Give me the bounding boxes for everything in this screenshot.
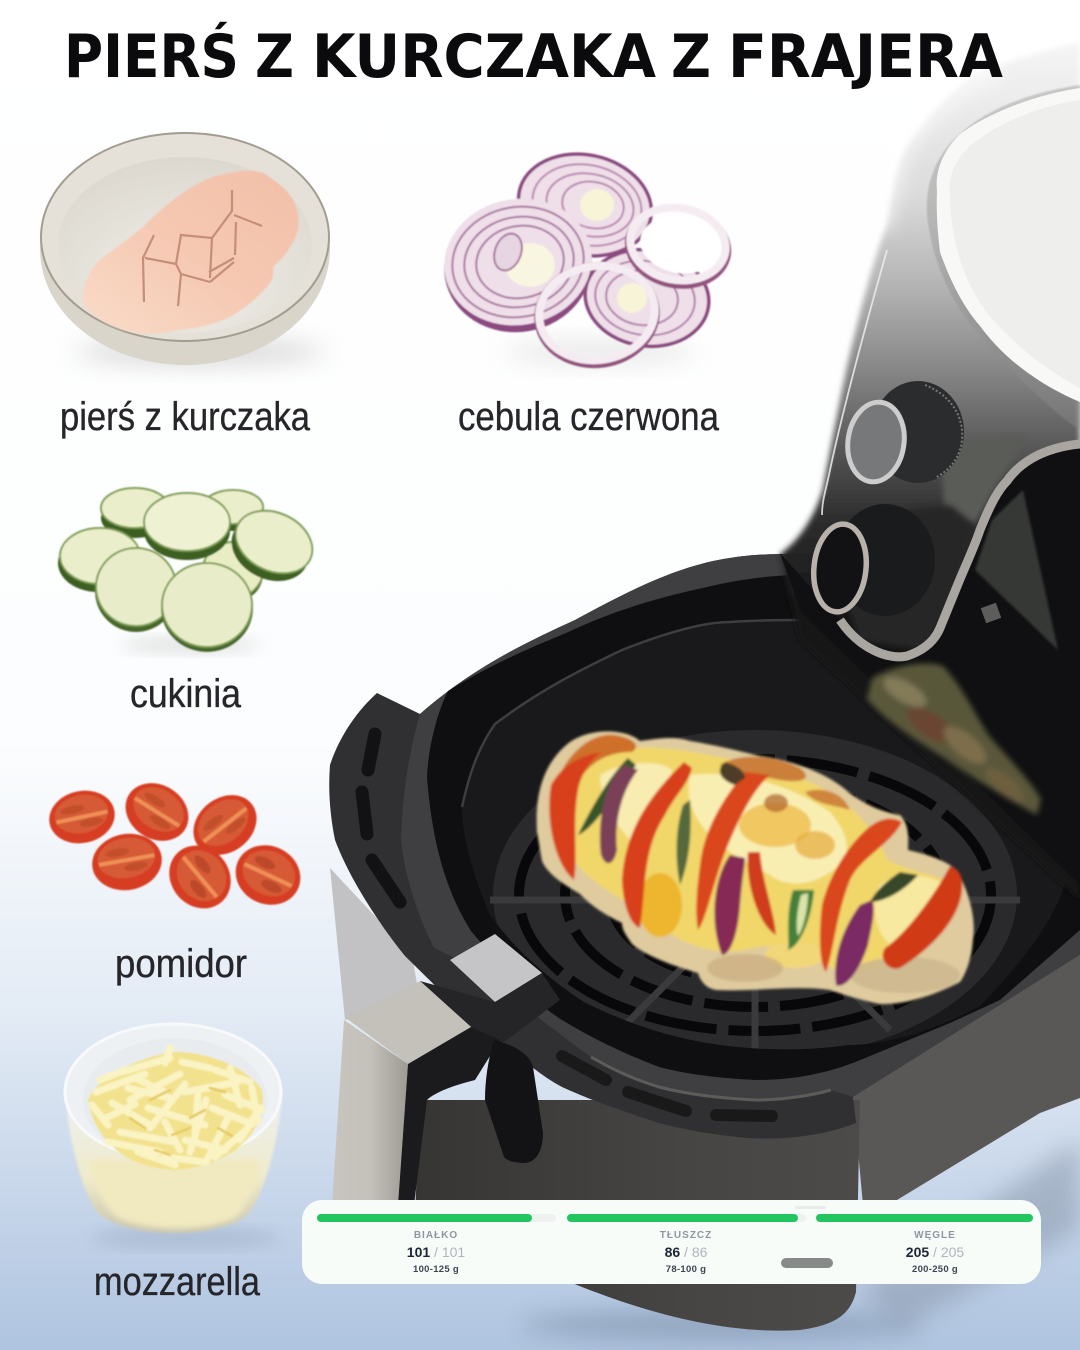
drawer black interior bbox=[427, 575, 1080, 1080]
panel glints bbox=[981, 603, 1001, 623]
red onion slices bbox=[600, 765, 638, 863]
macro: fat: 78-100 g bbox=[666, 1264, 706, 1275]
ingredient: chicken in bowl bbox=[40, 133, 330, 366]
cup shadow bbox=[90, 1228, 280, 1248]
fryer body centre bbox=[415, 1100, 860, 1331]
tomato 5 bbox=[157, 833, 243, 921]
upper dial bbox=[843, 381, 964, 486]
macro: protein: 100-125 g bbox=[413, 1264, 459, 1275]
ingredient: mozzarella in cup bbox=[65, 1024, 282, 1248]
onion ring bottom bbox=[529, 256, 665, 374]
rim slots bottom bbox=[562, 1056, 772, 1116]
floor shadow right bbox=[860, 1140, 1080, 1330]
label: tomato: pomidor bbox=[115, 942, 247, 986]
drag handle bbox=[781, 1258, 833, 1268]
title: Z bbox=[671, 22, 711, 92]
cup rim bbox=[65, 1024, 281, 1160]
air fryer with cooked chicken bbox=[329, 42, 1080, 1341]
onion ring right bbox=[621, 200, 735, 294]
control panel bbox=[780, 444, 1080, 885]
macro: carbs bbox=[816, 1214, 1033, 1275]
fryer white lid bbox=[937, 88, 1080, 402]
macro: protein bbox=[317, 1214, 556, 1275]
ingredient: zucchini slices bbox=[58, 488, 323, 653]
shredded cheese bbox=[88, 1048, 263, 1170]
chicken lower crust bbox=[850, 957, 960, 993]
fryer body right side bbox=[853, 955, 1080, 1205]
drawer outer rim bbox=[329, 554, 1080, 1139]
basil leaves bbox=[578, 758, 636, 835]
label: onion: cebula czerwona bbox=[458, 395, 720, 439]
chicken with toppings bbox=[537, 731, 974, 1004]
zucchini piece bbox=[788, 890, 814, 950]
dark face between dials bbox=[830, 505, 975, 650]
handle silver front bbox=[332, 1020, 408, 1205]
bowl bbox=[40, 133, 330, 365]
label: mozzarella: mozzarella bbox=[94, 1260, 261, 1304]
silver trim curve bbox=[840, 444, 1080, 657]
cheese seen through the cup bbox=[88, 1160, 260, 1228]
macro: carbs: 205 / 205 bbox=[906, 1244, 964, 1260]
tomato 4 bbox=[88, 828, 166, 896]
handle black grip bbox=[485, 1040, 543, 1163]
ingredient: cherry tomatoes bbox=[44, 772, 310, 921]
tomato 2 bbox=[115, 772, 199, 852]
floor shadow bbox=[520, 1309, 920, 1341]
fryer body left wedge bbox=[330, 868, 420, 1020]
zucchini left bbox=[58, 528, 140, 592]
reflection of chicken in panel bbox=[867, 663, 1041, 815]
basket grid bbox=[490, 730, 1020, 1060]
rim slots left bbox=[362, 734, 400, 902]
lid outer band bbox=[927, 85, 1080, 430]
silver handle cap bbox=[346, 981, 471, 1064]
grey face beside dials bbox=[940, 436, 1030, 525]
melted cheese bbox=[556, 748, 951, 971]
cup body bbox=[66, 1095, 282, 1233]
title: Z bbox=[255, 22, 294, 92]
title bbox=[64, 21, 1004, 92]
housing soft highlight edge bbox=[884, 68, 1000, 230]
title: FRAJERA bbox=[728, 22, 1004, 92]
onion large slice bbox=[434, 187, 602, 344]
chicken breast bbox=[537, 731, 974, 1004]
macro: carbs: WĘGLE bbox=[914, 1230, 956, 1241]
macro: protein: BIAŁKO bbox=[414, 1230, 458, 1241]
zucchini centre bbox=[144, 493, 230, 560]
ingredient: red onion bbox=[434, 142, 735, 374]
macro: fat bbox=[567, 1214, 806, 1275]
onion lower right slice bbox=[579, 242, 715, 354]
zucchini hidden bbox=[203, 542, 263, 602]
tomato 3 bbox=[182, 783, 268, 867]
basket liner bbox=[462, 620, 1068, 1049]
label: zucchini: cukinia bbox=[130, 672, 242, 716]
zucchini back left bbox=[101, 488, 169, 538]
drawer wall bbox=[401, 554, 1080, 1100]
zucchini back right bbox=[203, 490, 263, 531]
lower rim band bbox=[591, 1057, 831, 1100]
zucchini front right bbox=[161, 563, 253, 652]
panel reflection grey wedge bbox=[975, 490, 1058, 650]
label: chicken: pierś z kurczaka bbox=[60, 395, 311, 439]
title: PIERŚ bbox=[64, 21, 239, 92]
golden crust top bbox=[553, 735, 636, 790]
macro: fat: TŁUSZCZ bbox=[660, 1230, 712, 1241]
raw chicken bbox=[82, 171, 299, 334]
macro: protein: 101 / 101 bbox=[407, 1244, 465, 1260]
zucchini front left bbox=[95, 548, 177, 632]
onion back slice bbox=[509, 142, 661, 268]
lower dial bbox=[810, 504, 935, 616]
macro: fat: 86 / 86 bbox=[665, 1244, 708, 1260]
fryer upper housing bbox=[780, 42, 1080, 900]
title: KURCZAKA bbox=[312, 22, 657, 92]
macro card bbox=[302, 1200, 1041, 1284]
silver handle slider bbox=[450, 934, 542, 1002]
tomato 6 bbox=[226, 835, 310, 915]
tomato slices bbox=[549, 752, 603, 880]
chicken score marks bbox=[143, 190, 262, 306]
macro: carbs: 200-250 g bbox=[912, 1264, 958, 1275]
tomato 1 bbox=[44, 785, 120, 849]
handle neck bbox=[420, 973, 560, 1045]
handle black stem bbox=[398, 1027, 500, 1205]
zucchini right bbox=[221, 499, 323, 593]
housing highlight line bbox=[822, 250, 887, 515]
